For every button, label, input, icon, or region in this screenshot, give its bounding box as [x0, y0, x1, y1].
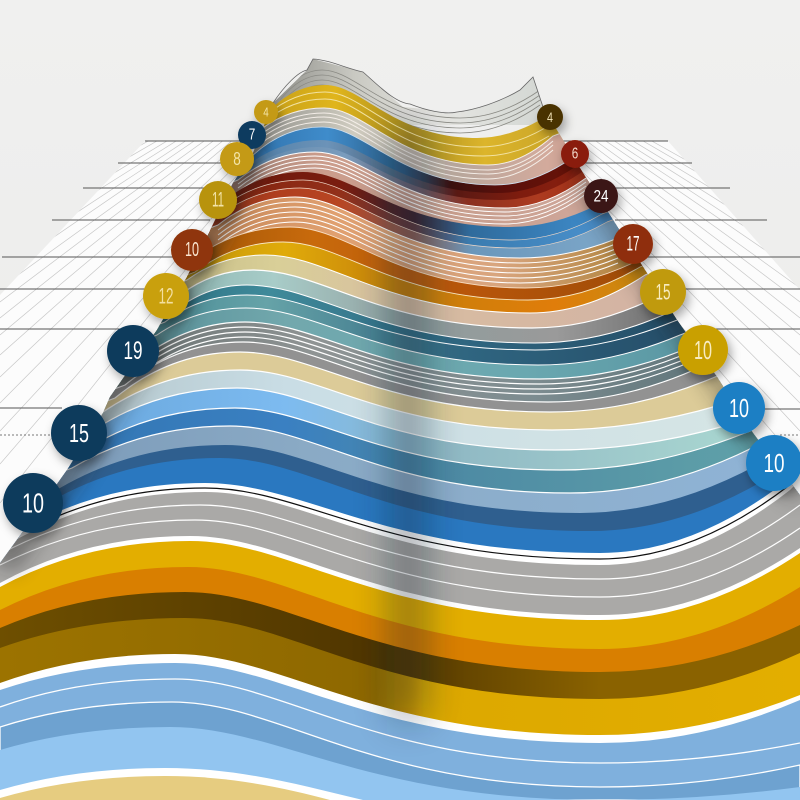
band: brown: [0, 592, 800, 699]
axis guide lines: [0, 141, 800, 435]
marker 10 blue: [713, 382, 765, 434]
band: white gap with black line: [0, 483, 800, 565]
top contour band: [272, 59, 548, 133]
band: steel blue: [0, 425, 750, 562]
marker 7: 7: [249, 126, 255, 144]
band: royal blue: [0, 458, 800, 562]
marker 8: [220, 142, 254, 176]
marker 10: [171, 229, 213, 271]
marker 12: 12: [158, 284, 174, 308]
marker 15: [51, 405, 107, 461]
marker 6: [561, 140, 589, 168]
marker 15: 15: [69, 418, 89, 448]
band: red left steel right: [156, 188, 619, 331]
marker 24: [584, 179, 618, 213]
band: grey: [65, 341, 724, 472]
marker 11: 11: [212, 188, 224, 212]
marker 10: 10: [185, 239, 199, 261]
marker 4 right: [537, 104, 563, 130]
marker 10 blue right: 10: [764, 448, 784, 478]
marker 24: 24: [594, 186, 608, 206]
band: steel left red right: [232, 147, 619, 229]
band: peach stripes: [189, 196, 682, 326]
band: tan pink: [162, 254, 676, 328]
floor grid: [0, 142, 800, 562]
band: blue teal: [8, 407, 758, 551]
band: blue left dark red right: [212, 126, 619, 229]
band: pale teal grey: [154, 269, 686, 342]
band: orange gold: [115, 242, 720, 390]
marker 12: [143, 273, 189, 319]
band: pale blue: [101, 369, 758, 450]
fold and edge shading: [0, 130, 800, 720]
band: tan: [101, 351, 724, 430]
band: white gap bottom: [0, 768, 363, 800]
band: white gap lower: [0, 654, 800, 743]
marker 17: [613, 224, 653, 264]
band: dark red left blue right: [156, 172, 646, 331]
marker 8: 8: [233, 149, 241, 169]
marker 10 bottom left: 10: [22, 488, 44, 518]
marker 4 right: 4: [547, 109, 553, 125]
marker 4: [254, 100, 278, 124]
marker 6: 6: [572, 146, 578, 162]
band: yellow: [0, 541, 800, 649]
marker 11: [199, 181, 237, 219]
band: dark blue: [0, 445, 800, 562]
marker 10 blue: 10: [729, 393, 749, 423]
band: gold: [0, 618, 800, 735]
marker 4: 4: [263, 104, 269, 120]
marker 19: [107, 325, 159, 377]
band: pale gold: [0, 776, 330, 800]
band: brick left blue right: [156, 180, 680, 331]
band: yellow top: [231, 85, 619, 229]
band: pink stripes: [232, 152, 612, 227]
band: teal light: [104, 308, 720, 410]
top outline: [273, 59, 543, 113]
marker 15 right: 15: [656, 280, 670, 304]
band: orange: [0, 567, 800, 672]
band: grey stripes lower: [0, 486, 800, 615]
marker 19: 19: [124, 337, 142, 365]
band: sky blue stripes: [0, 663, 800, 800]
marker 10 blue right: [746, 435, 800, 491]
band: steel left maroon right: [212, 140, 619, 229]
left value markers: [3, 100, 278, 533]
band: teal mid: [104, 294, 722, 410]
band: light blue: [0, 727, 800, 800]
band: grey stripes: [253, 108, 566, 185]
marker 10 bottom left: [3, 473, 63, 533]
band: teal dark: [102, 284, 723, 415]
marker 15 right: [640, 269, 686, 315]
band: white gap: [0, 536, 800, 620]
right value markers: [537, 104, 800, 491]
marker 10 gold: 10: [694, 335, 712, 365]
band: dark orange: [155, 226, 685, 332]
marker 10 gold: [678, 325, 728, 375]
marker 7: [238, 121, 266, 149]
band: light blue teal: [22, 387, 740, 532]
marker 17: 17: [626, 232, 640, 256]
band: grey teal stripes: [104, 321, 690, 410]
